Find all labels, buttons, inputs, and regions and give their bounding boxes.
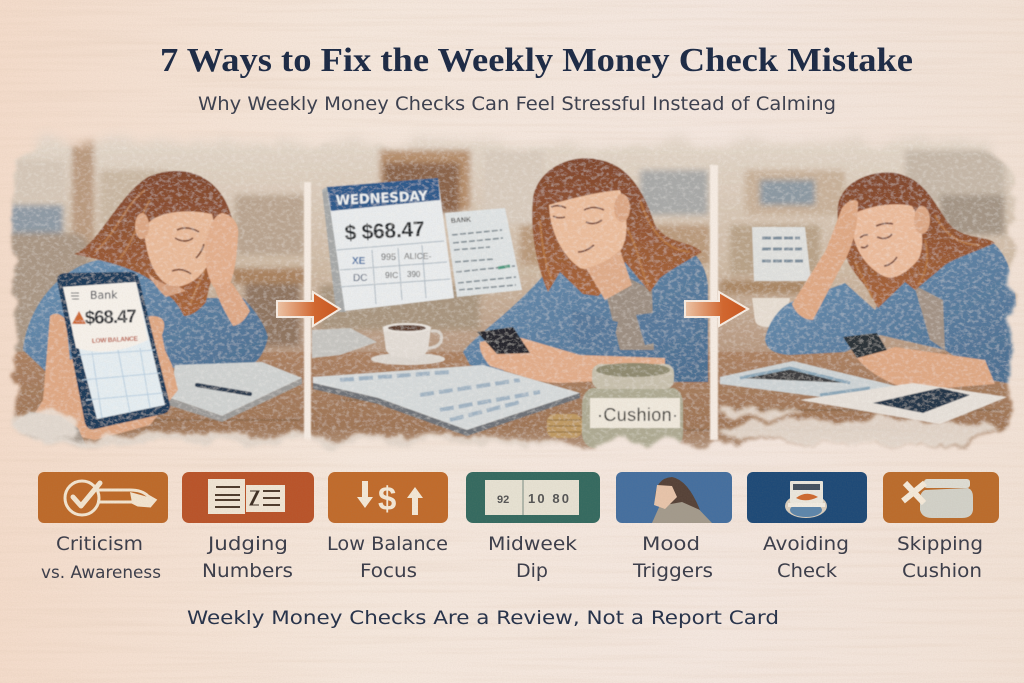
- calendar: Wednesday: 9IC: [385, 270, 398, 280]
- arrow: panel 1 to 2: [277, 292, 340, 326]
- arrow: panel 2 to 3: [685, 292, 748, 326]
- labels under icons: Numbers: [202, 560, 293, 582]
- labels under icons: Low Balance: [327, 533, 448, 555]
- illustration: three-panel scene: [0, 120, 1024, 452]
- icon tile: midweek dip: 92: [497, 494, 509, 506]
- calendar: Wednesday: DC: [353, 273, 367, 284]
- calendar: Wednesday: 995: [381, 252, 396, 262]
- labels under icons: Criticism: [56, 533, 143, 555]
- closing tagline: Weekly Money Checks Are a Review, Not a Report Card: [187, 607, 779, 629]
- icon tile: low balance focus: [328, 472, 448, 523]
- open notebook: [313, 365, 580, 436]
- woman: [765, 173, 1017, 390]
- labels under icons: Cushion: [902, 560, 982, 582]
- calendar: Wednesday: XE: [352, 256, 366, 267]
- coffee cup: [752, 298, 790, 327]
- phone: low balance: $68.47: [84, 305, 137, 328]
- icon tile: midweek dip: 10 80: [528, 491, 569, 506]
- title: 7 Ways to Fix the Weekly Money Check Mistake: [160, 42, 913, 79]
- coffee cup: [371, 323, 445, 365]
- panel 1: stressed woman with bank app: [0, 171, 302, 450]
- labels under icons: Dip: [516, 560, 548, 582]
- table: [0, 352, 1024, 452]
- calendar: Wednesday: [322, 178, 454, 312]
- icon tile: low balance focus: $: [378, 480, 396, 517]
- fog along table edge: [0, 407, 1000, 450]
- labels under icons: Midweek: [488, 533, 577, 555]
- icon tile: criticism vs awareness: [38, 472, 168, 523]
- hand holding phone: [14, 313, 178, 444]
- documents on desk: [720, 361, 1007, 424]
- icon tile: judging numbers: [182, 472, 314, 523]
- icon tile: midweek dip: [466, 472, 600, 523]
- desk papers and pen: [168, 362, 302, 422]
- labels under icons: Mood: [642, 533, 700, 555]
- icon tile: avoiding check: [747, 472, 867, 523]
- labels under icons: Avoiding: [763, 533, 849, 555]
- icon tile: mood triggers: [616, 472, 732, 523]
- woman with phone: [463, 158, 708, 383]
- labels under icons: Triggers: [632, 560, 713, 582]
- phone: low balance: [57, 272, 170, 429]
- cushion jar: ·Cushion·: [597, 405, 678, 425]
- panel divider bars: [304, 165, 718, 442]
- phone: low balance: LOW BALANCE: [92, 336, 139, 345]
- labels under icons: Judging: [207, 533, 288, 555]
- calculator: [873, 388, 970, 413]
- phone: low balance: Bank: [90, 289, 118, 302]
- panel 2: calm woman with calendar and cushion jar: [312, 158, 708, 449]
- scene backdrop: blurred interior: [9, 135, 1018, 352]
- icon tile: skipping cushion: [883, 472, 999, 523]
- labels under icons: [41, 533, 983, 582]
- bank statement: BANK: [451, 217, 471, 225]
- calendar: Wednesday: WEDNESDAY: [335, 188, 428, 209]
- labels under icons: Focus: [360, 560, 417, 582]
- calendar: Wednesday: ALICE-: [404, 251, 432, 261]
- coins: [547, 414, 582, 438]
- cushion jar: [582, 363, 683, 449]
- woman at desk: [23, 171, 268, 385]
- statement on the wall: [752, 227, 811, 281]
- labels under icons: vs. Awareness: [41, 563, 161, 582]
- labels under icons: Skipping: [897, 533, 983, 555]
- stacked papers: [312, 328, 377, 358]
- bank statement: [445, 208, 522, 297]
- labels under icons: Check: [777, 560, 837, 582]
- calendar: Wednesday: 390: [407, 270, 421, 279]
- calendar: Wednesday: $ $68.47: [344, 218, 425, 245]
- subtitle: Why Weekly Money Checks Can Feel Stressful Instead of Calming: [198, 93, 836, 115]
- panel 3: reflective woman with phone and calculator: [720, 173, 1017, 424]
